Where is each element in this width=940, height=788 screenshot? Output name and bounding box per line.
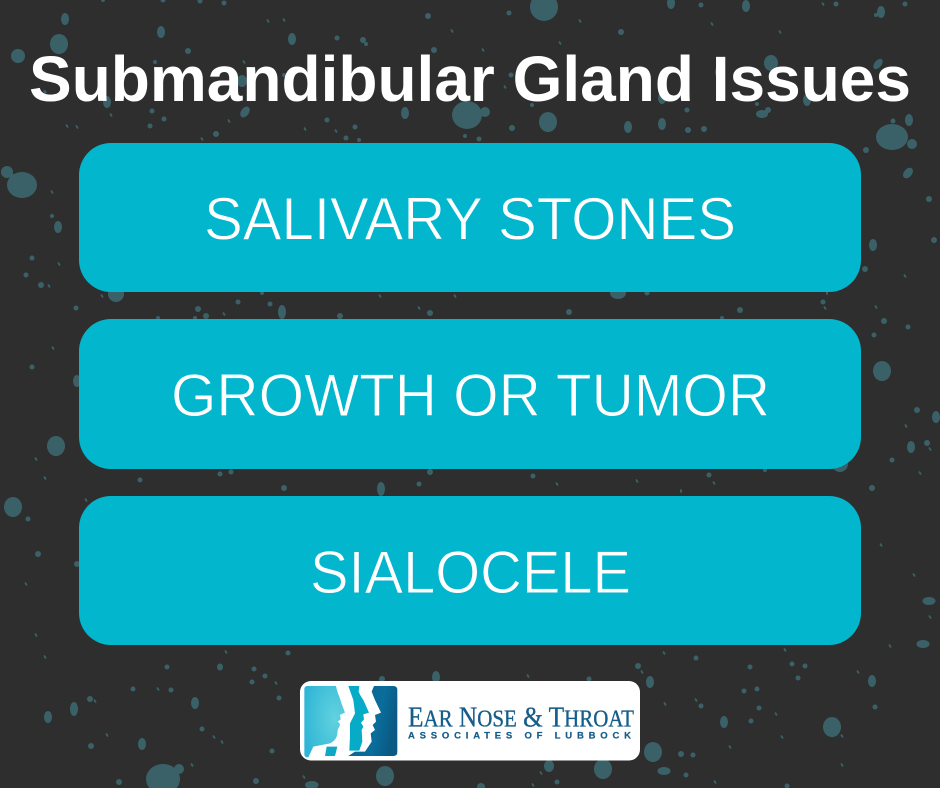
- logo tagline: ASSOCIATES OF LUBBOCK: [408, 730, 631, 742]
- title: Submandibular Gland Issues: [29, 43, 911, 115]
- label: sialocele: SIALOCELE: [310, 538, 631, 606]
- logo wordmark: EAR NOSE & THROAT: [408, 702, 634, 734]
- label: salivary stones: SALIVARY STONES: [204, 184, 736, 252]
- panel: salivary stones: [79, 143, 861, 292]
- icon: three face profiles: [304, 686, 397, 757]
- label: growth or tumor: GROWTH OR TUMOR: [171, 361, 770, 429]
- panel: sialocele: [79, 496, 861, 645]
- logo: Ear Nose & Throat Associates of Lubbock: [300, 681, 640, 760]
- panel: growth or tumor: [79, 319, 861, 469]
